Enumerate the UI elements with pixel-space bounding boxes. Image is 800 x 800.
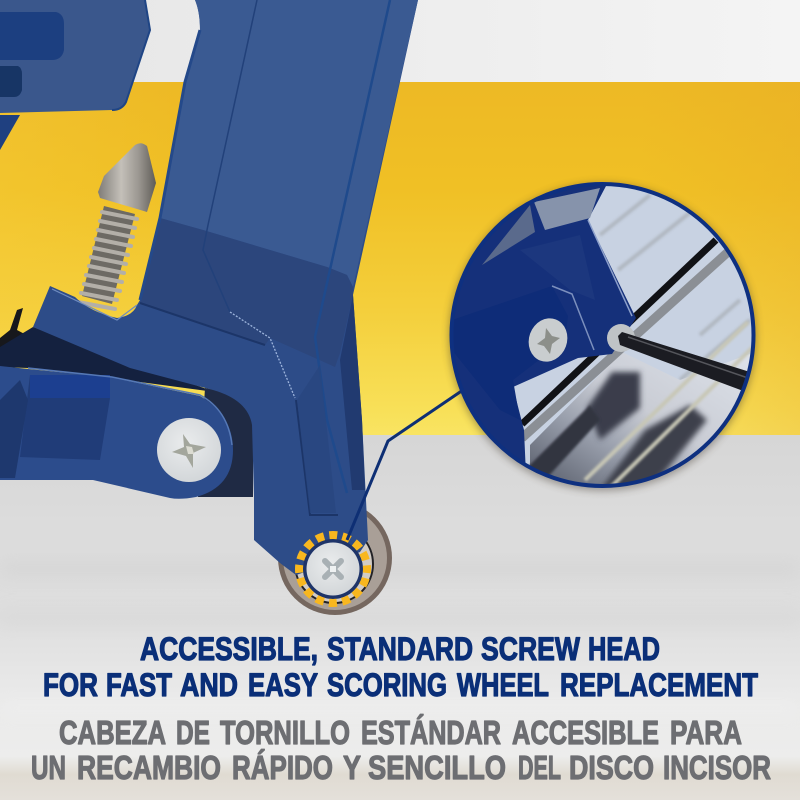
close-up screw <box>528 318 568 362</box>
phillips recess <box>325 561 341 577</box>
jack column and arm <box>33 0 418 575</box>
lower lug <box>0 366 233 499</box>
callout leader line <box>347 390 463 540</box>
heading: Spanish: RÁPIDO <box>232 749 333 786</box>
right dark strip <box>340 295 365 490</box>
ribbed upper table <box>600 195 750 380</box>
lug screw head <box>157 418 221 482</box>
dark gap behind arm <box>0 327 215 392</box>
crease lines <box>203 0 257 312</box>
black slot <box>522 240 716 424</box>
heading: Spanish: Y <box>343 749 361 786</box>
heading: Spanish: RECAMBIO <box>77 749 221 786</box>
screw at driver tip <box>607 324 635 352</box>
shadow behind lug <box>198 388 253 497</box>
callout circle: close-up of screwdriver <box>445 183 760 500</box>
left column edge highlight <box>140 30 200 300</box>
spring bolt <box>78 143 156 309</box>
heading: Spanish: ACCESIBLE <box>512 714 659 751</box>
heading: English: STANDARD <box>327 631 473 667</box>
chrome rail <box>522 252 728 438</box>
coil spring <box>78 206 137 309</box>
heading: Spanish: INCISOR <box>663 749 771 786</box>
column dark band <box>140 218 353 367</box>
column upper facets <box>160 0 418 287</box>
chrome table lower <box>530 354 750 484</box>
heading: English: ACCESSIBLE, <box>140 631 318 667</box>
heading: Spanish: DE <box>176 714 210 751</box>
heading: English: FAST <box>106 667 172 703</box>
background: yellow panel <box>0 82 800 435</box>
dark reflections <box>587 372 640 440</box>
heading: Spanish: DISCO <box>569 749 654 786</box>
yellow dashed ring <box>299 535 367 603</box>
heading: Spanish: UN <box>31 749 66 786</box>
bolt tip <box>98 143 156 212</box>
heading: Spanish: TORNILLO <box>220 714 350 751</box>
wheel screw with dashed highlight <box>299 535 367 603</box>
heading: Spanish: ESTÁNDAR <box>361 714 501 751</box>
heading: Spanish: CABEZA <box>59 714 166 751</box>
inner panel <box>297 365 336 513</box>
heading: English: REPLACEMENT <box>560 667 758 703</box>
close-up background <box>514 186 752 465</box>
top-left bracket <box>0 0 150 150</box>
heading: English: WHEEL <box>457 667 549 703</box>
heading: English: SCREW <box>481 631 581 667</box>
heading: Spanish: SENCILLO <box>368 749 506 786</box>
heading: English <box>43 631 758 703</box>
heading: English: AND <box>180 667 238 703</box>
navy disc <box>303 539 363 599</box>
background: white wall band <box>0 0 800 83</box>
callout ring <box>452 184 754 486</box>
heading: Spanish <box>31 714 771 786</box>
heading: Spanish: DEL <box>518 749 561 786</box>
heading: English: FOR <box>43 667 98 703</box>
heading: English: HEAD <box>588 631 660 667</box>
background: concrete floor <box>0 435 800 800</box>
hex driver <box>618 332 750 392</box>
black lever <box>0 308 32 350</box>
heading: English: EASY <box>248 667 318 703</box>
heading: Spanish: PARA <box>670 714 742 751</box>
heading: English: SCORING <box>327 667 447 703</box>
silhouette <box>33 0 418 575</box>
scoring wheel <box>278 501 392 615</box>
screw head <box>306 542 360 596</box>
blue bracket <box>445 183 636 475</box>
